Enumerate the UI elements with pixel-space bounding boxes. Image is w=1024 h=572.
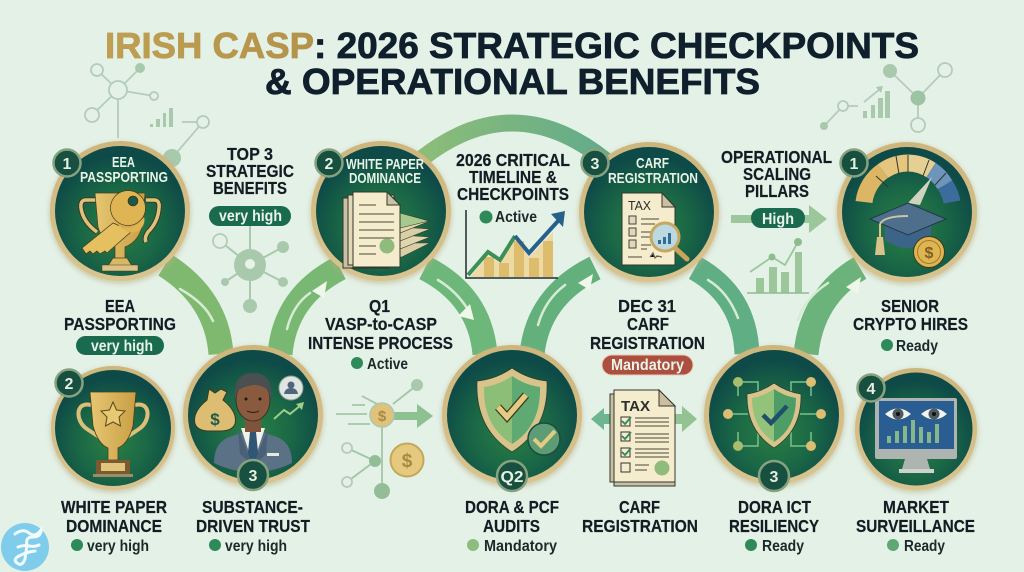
icon: documents <box>343 192 430 268</box>
badge 2: 2 <box>325 156 334 173</box>
panel: senior crypto hires medallion <box>836 142 978 285</box>
text block: EEA passporting: very high <box>91 338 153 355</box>
text block: 2026 critical timeline: 2026 CRITICAL <box>456 150 570 170</box>
text block: top 3 strategic benefits: BENEFITS <box>213 178 287 198</box>
icon: trophy and key <box>81 190 159 271</box>
disc label: DOMINANCE <box>349 170 421 187</box>
icon: tax document with magnifier <box>622 193 687 265</box>
text block: operational scaling pillars: SCALING <box>743 164 811 184</box>
icon: tax document with magnifier: TAX <box>628 199 652 213</box>
text block: 2026 critical timeline: TIMELINE & <box>469 167 557 187</box>
icon: money bag <box>194 389 236 431</box>
title: IRISH CASP <box>105 25 314 66</box>
text block: senior crypto hires: Ready <box>896 338 938 355</box>
icon: gauge <box>864 155 952 205</box>
badge 4: 4 <box>867 381 876 398</box>
badge 2: 2 <box>65 376 74 393</box>
icon: gold trophy <box>78 392 148 477</box>
text block: Dec 31 CARF registration: REGISTRATION <box>590 333 705 353</box>
text block: DORA and PCF audits: DORA & PCF <box>465 497 559 517</box>
badge 1: 1 <box>63 156 72 173</box>
icon: money bag: $ <box>210 410 220 429</box>
text block: white paper dominance: DOMINANCE <box>66 516 162 536</box>
text block: Q1 VASP-to-CASP <box>308 296 453 373</box>
text block: operational scaling pillars: OPERATIONAL <box>721 147 832 167</box>
text block: DORA ICT resiliency: RESILIENCY <box>729 516 819 536</box>
text block: market surveillance: SURVEILLANCE <box>856 516 975 536</box>
text block: Dec 31 CARF registration: DEC 31 <box>618 296 676 316</box>
text block: Dec 31 CARF registration: Mandatory <box>611 357 684 374</box>
text block: senior crypto hires: SENIOR <box>881 296 939 316</box>
arrow with high pill <box>731 205 827 233</box>
text block: DORA and PCF audits: Mandatory <box>484 538 557 555</box>
title <box>105 25 919 102</box>
badge 1 <box>54 150 80 176</box>
panel: EEA passporting medallion <box>49 141 191 284</box>
text block: substance-driven trust: DRIVEN TRUST <box>196 516 310 536</box>
title: : 2026 STRATEGIC CHECKPOINTS <box>314 25 919 66</box>
text block: senior crypto hires <box>853 296 968 355</box>
decorative network: top left <box>85 63 209 167</box>
icon: trend arrow <box>274 402 304 419</box>
icon: avatar <box>279 376 303 400</box>
text block: CARF registration <box>582 497 698 536</box>
panel: DORA and PCF audits medallion <box>441 345 583 491</box>
badge 2 <box>316 150 342 176</box>
icon: tax checklist with arrows: TAX <box>621 398 650 415</box>
text block: Dec 31 CARF registration: CARF <box>627 314 669 334</box>
badge 1: 1 <box>850 156 859 173</box>
icon: coin flow network: $ <box>402 451 413 472</box>
icon: graduation cap and coin <box>870 203 946 268</box>
badge 1 <box>840 150 868 176</box>
disc label <box>80 154 168 186</box>
icon: business person <box>214 373 292 472</box>
text block: Q1 VASP-to-CASP: Q1 <box>369 296 390 316</box>
logo mark <box>1 523 49 571</box>
panel: market surveillance medallion <box>854 368 978 493</box>
disc label: EEA <box>112 154 135 171</box>
arrow with high pill: High <box>762 211 794 228</box>
text block: top 3 strategic benefits: very high <box>219 208 282 225</box>
icon: circuit shield <box>723 377 826 451</box>
text block: Q1 VASP-to-CASP: Active <box>367 356 408 373</box>
text block: top 3 strategic benefits <box>206 144 294 226</box>
text block: senior crypto hires: CRYPTO HIRES <box>853 314 968 334</box>
text block: EEA passporting: PASSPORTING <box>64 314 176 334</box>
text block: Q1 VASP-to-CASP: INTENSE PROCESS <box>308 333 453 353</box>
disc label <box>608 155 698 187</box>
disc label: CARF <box>636 155 669 172</box>
icon: coin flow network <box>336 379 433 499</box>
icon: coin flow network: $ <box>378 408 387 425</box>
text block: top 3 strategic benefits: TOP 3 <box>227 144 273 164</box>
disc label: PASSPORTING <box>80 169 168 186</box>
badge Q2: Q2 <box>500 469 524 486</box>
text block: EEA passporting <box>64 296 176 355</box>
text block: substance-driven trust: very high <box>225 538 287 555</box>
text block: 2026 critical timeline: CHECKPOINTS <box>457 184 569 204</box>
badge 3 <box>582 150 608 176</box>
text block: DORA ICT resiliency: Ready <box>762 538 804 555</box>
disc label: REGISTRATION <box>608 170 698 187</box>
text block: market surveillance: MARKET <box>883 497 949 517</box>
text block: substance-driven trust <box>196 497 310 555</box>
text block: white paper dominance: WHITE PAPER <box>61 497 167 517</box>
panel: white paper medallion <box>310 141 452 284</box>
connector arcs <box>165 123 861 354</box>
text block: DORA and PCF audits: AUDITS <box>483 516 540 536</box>
title: & OPERATIONAL BENEFITS <box>265 61 760 102</box>
text block: CARF registration: CARF <box>619 497 660 517</box>
panel: DORA ICT resiliency medallion <box>703 345 845 491</box>
text block: 2026 critical timeline: Active <box>495 209 537 226</box>
badge 3: 3 <box>770 469 779 486</box>
text block: top 3 strategic benefits: STRATEGIC <box>206 161 294 181</box>
text block: DORA ICT resiliency: DORA ICT <box>738 497 811 517</box>
text block: DORA ICT resiliency <box>729 497 819 555</box>
disc label <box>346 156 424 187</box>
icon: network hub <box>213 226 289 313</box>
chart: timeline growth <box>466 210 565 278</box>
badge 3: 3 <box>249 468 258 485</box>
text block: market surveillance: Ready <box>904 538 945 555</box>
panel: substance-driven trust medallion <box>182 345 324 490</box>
text block: operational scaling pillars <box>721 147 832 201</box>
icon: monitor with eyes <box>875 398 957 473</box>
text block: Dec 31 CARF registration <box>590 296 705 375</box>
decorative network: top right <box>820 63 952 132</box>
text block: EEA passporting: EEA <box>105 296 135 316</box>
icon: tax checklist with arrows <box>591 390 697 486</box>
text block: market surveillance <box>856 497 975 555</box>
icon: graduation cap and coin: $ <box>925 245 934 262</box>
icon: shield with checks <box>477 368 560 455</box>
badge Q2 <box>497 461 527 491</box>
badge 3 <box>759 461 789 491</box>
text block: substance-driven trust: SUBSTANCE- <box>202 497 303 517</box>
text block: white paper dominance: very high <box>87 538 149 555</box>
panel: white paper dominance trophy medallion <box>50 366 176 493</box>
text block: DORA and PCF audits <box>465 497 559 555</box>
badge 3 <box>238 460 268 490</box>
disc label: WHITE PAPER <box>346 156 424 173</box>
chart: small scaling bars <box>747 238 809 293</box>
text block: CARF registration: REGISTRATION <box>582 516 698 536</box>
text block: white paper dominance <box>61 497 167 555</box>
text block: Q1 VASP-to-CASP: VASP-to-CASP <box>325 314 437 334</box>
text block: operational scaling pillars: PILLARS <box>745 181 809 201</box>
badge 3: 3 <box>591 156 600 173</box>
panel: CARF medallion <box>578 142 720 285</box>
text block: 2026 critical timeline <box>456 150 570 226</box>
